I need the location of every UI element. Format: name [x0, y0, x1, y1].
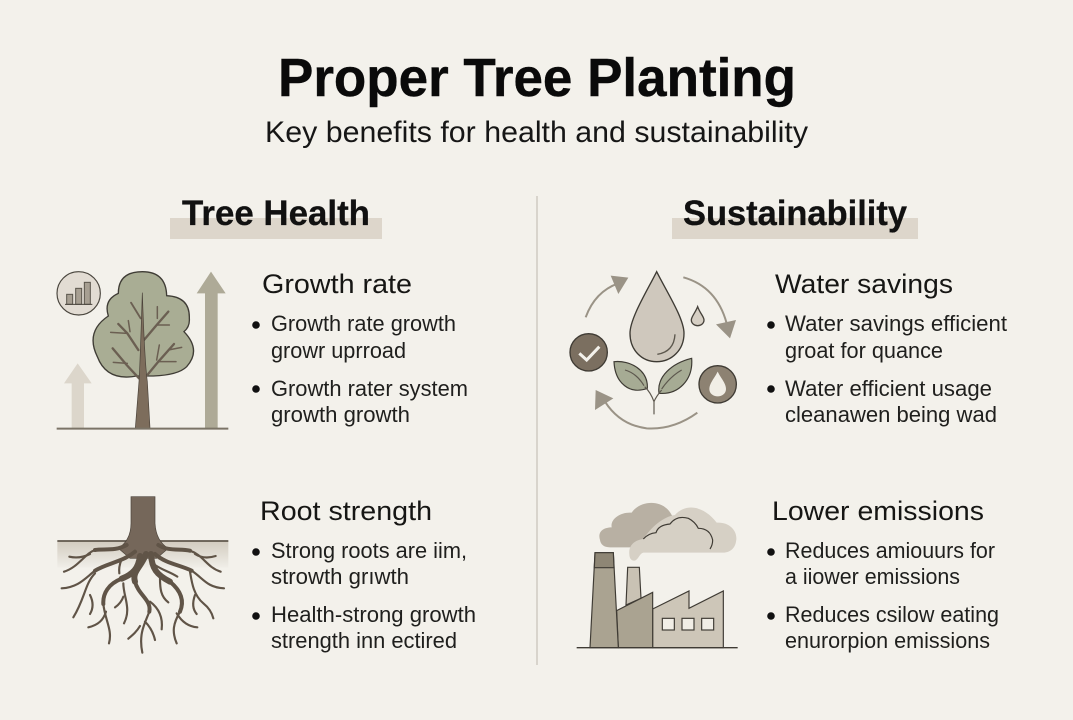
subtitle: Key benefits for health and sustainability [265, 116, 808, 149]
icon: water badge [699, 366, 736, 403]
text block: lower emissions [767, 496, 999, 653]
text block: root strength: strength inn ectired [271, 628, 457, 653]
text block: lower emissions: a iiower emissions [785, 564, 960, 589]
panel: tree health [57, 194, 476, 653]
text block: lower emissions: Reduces csilow eating [785, 602, 999, 627]
text block: water savings [767, 269, 1007, 427]
text block: water savings: Water efficient usage [785, 376, 992, 401]
text block: root strength: strowth grıwth [271, 564, 409, 589]
text block: water savings: Water savings efficient [785, 311, 1007, 336]
text block: root strength [252, 496, 476, 653]
icon: check badge [570, 334, 607, 371]
icon: bar chart badge [57, 272, 100, 315]
text block: growth rate [252, 269, 468, 427]
icon: water cycle [570, 272, 736, 428]
text block: lower emissions: Reduces amiouurs for [785, 538, 995, 563]
text block: growth rate: Growth rate growth [271, 311, 456, 336]
text block: growth rate: growr uprroad [271, 338, 406, 363]
text block: growth rate: growth growth [271, 402, 410, 427]
text block: growth rate: Growth rate [262, 269, 412, 299]
text block: root strength: Strong roots are iim, [271, 538, 467, 563]
title: Proper Tree Planting [278, 48, 796, 108]
heading: tree health: Tree Health [182, 194, 370, 233]
text block: water savings: groat for quance [785, 338, 943, 363]
text block: water savings: cleanawen being wad [785, 402, 997, 427]
icon: tree growth [57, 272, 228, 429]
icon: factory [577, 503, 738, 648]
icon: roots [57, 497, 228, 653]
text block: lower emissions: Lower emissions [772, 496, 984, 526]
text block: root strength: Health-strong growth [271, 602, 476, 627]
text block: lower emissions: enurorpion emissions [785, 628, 990, 653]
text block: root strength: Root strength [260, 496, 432, 526]
heading: sustainability: Sustainability [683, 194, 908, 233]
panel: sustainability [570, 194, 1007, 653]
text block: growth rate: Growth rater system [271, 376, 468, 401]
text block: water savings: Water savings [775, 269, 953, 299]
